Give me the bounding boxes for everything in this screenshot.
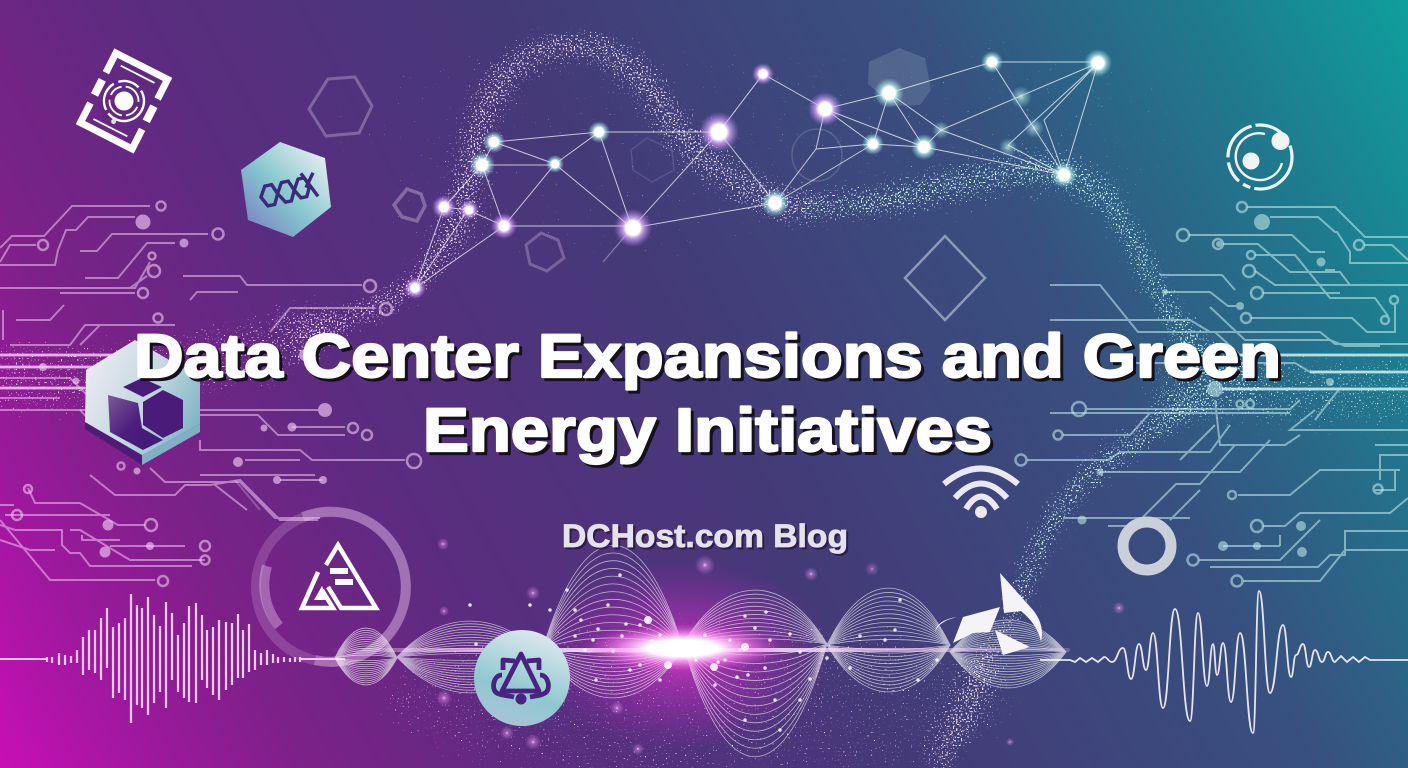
sound wave: left bars bbox=[0, 594, 345, 723]
title line 1: Data Center Expansions and Green bbox=[134, 322, 1281, 390]
icon: white origami shards bbox=[935, 573, 1042, 655]
hexagon outline: top left bbox=[309, 77, 372, 136]
ellipse outline bbox=[792, 129, 842, 181]
icon: recycling badge bbox=[474, 630, 570, 726]
hexagon outline: dim centre bbox=[631, 138, 674, 182]
icon: hexagon chain badge bbox=[241, 142, 331, 237]
title bbox=[134, 322, 1281, 464]
sine wave lobes bbox=[335, 545, 1066, 757]
central flare bbox=[583, 624, 783, 672]
energy beam bbox=[330, 648, 1070, 652]
bokeh lights bbox=[436, 538, 1125, 755]
icon: rotated target card bbox=[80, 53, 168, 149]
sparkles bbox=[470, 545, 937, 730]
pink core glow bbox=[533, 560, 833, 750]
faint filled polygon bbox=[868, 48, 931, 106]
title line 2: Energy Initiatives bbox=[423, 396, 992, 464]
hexagon outline: small bbox=[394, 189, 425, 221]
subtitle: DCHost.com Blog bbox=[562, 518, 848, 554]
dim streak bbox=[603, 228, 632, 262]
network nodes bbox=[404, 49, 1112, 299]
circuit traces: left bbox=[0, 206, 405, 580]
icon: 3D hexagon cube bbox=[85, 340, 200, 465]
hexagon outline: lower network bbox=[526, 233, 564, 271]
network constellation bbox=[404, 49, 1112, 299]
icon: orbit rings bbox=[1228, 125, 1292, 189]
circuit nodes: left bbox=[12, 202, 421, 586]
circuit traces: right bbox=[1027, 207, 1408, 581]
icon: wifi bbox=[944, 468, 1018, 518]
energy wave bundle bbox=[330, 538, 1125, 757]
diamond outline bbox=[905, 236, 985, 320]
sound wave: right line bbox=[1040, 591, 1408, 733]
circuit nodes: right bbox=[1016, 202, 1398, 586]
faint outline shapes bbox=[309, 48, 985, 320]
network links bbox=[415, 62, 1098, 288]
icon: arc ring bbox=[256, 512, 406, 662]
icon: triangle logo bbox=[302, 545, 376, 608]
icon: large ring bbox=[1123, 522, 1171, 570]
